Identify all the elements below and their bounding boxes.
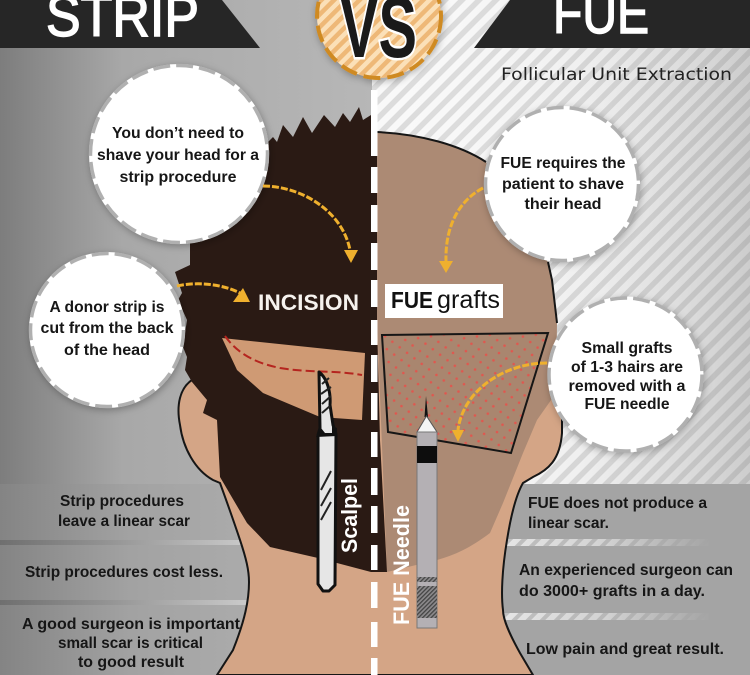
arrow: small grafts to graft area: [452, 363, 547, 442]
callout: FUE requires shaving: [484, 106, 640, 262]
callout: no shaving for strip: [89, 64, 269, 244]
text: right panel points: FUE does not produce a: [528, 495, 707, 512]
arrow: shaving callout to incision: [263, 186, 358, 263]
label: FUE grafts: [385, 284, 503, 318]
FUE graft area: [382, 333, 548, 453]
callout: FUE requires shaving: FUE requires the: [500, 155, 626, 172]
header banner: STRIP: [0, 0, 260, 49]
callout: small grafts: [548, 296, 704, 452]
callout: small grafts: of 1-3 hairs are: [571, 359, 683, 376]
incision dashed line: [225, 336, 362, 375]
icon: scalpel: [316, 372, 337, 591]
callout: donor strip: A donor strip is: [50, 299, 165, 316]
text: left panel points: to good result: [78, 654, 184, 671]
head illustration: [175, 107, 562, 675]
text: right panel points: An experienced surgeon can: [519, 562, 733, 579]
strip incision flap: [222, 338, 365, 420]
callout: donor strip: cut from the back: [40, 320, 174, 337]
callout: donor strip: of the head: [64, 342, 150, 359]
callout: small grafts: FUE needle: [584, 396, 670, 413]
arrow: donor callout to incision: [177, 284, 250, 302]
center dashed divider: [371, 90, 378, 675]
left comparison panels: [0, 484, 260, 675]
header banner: FUE: [474, 0, 750, 48]
text: right panel points: [519, 495, 733, 658]
scalp outline: [377, 132, 557, 323]
text: left panel points: A good surgeon is important: [22, 616, 240, 633]
text: right panel points: Low pain and great result.: [526, 641, 724, 658]
arrow: FUE callout to grafts: [439, 188, 483, 273]
shaved scalp right: [377, 132, 557, 572]
background: right FUE side: [372, 0, 750, 675]
callout: donor strip: [29, 252, 185, 408]
text: left panel points: Strip procedures cost less.: [25, 564, 223, 581]
text: right panel points: linear scar.: [528, 515, 609, 532]
background: left strip side: [0, 0, 372, 675]
callout: small grafts: Small grafts: [582, 340, 673, 357]
hair left: [175, 107, 387, 572]
right comparison panels: [490, 484, 750, 675]
text: left panel points: [22, 493, 240, 671]
text: left panel points: leave a linear scar: [58, 513, 190, 530]
callout: no shaving for strip: strip procedure: [120, 169, 237, 186]
text: right panel points: do 3000+ grafts in a day.: [519, 583, 705, 600]
label: Scalpel: Scalpel: [337, 478, 362, 553]
callout: FUE requires shaving: patient to shave: [502, 176, 624, 193]
label: FUE grafts: grafts: [437, 286, 500, 314]
label: FUE grafts: FUE: [391, 287, 433, 313]
subtitle: Follicular Unit Extraction: [501, 65, 732, 85]
callout: no shaving for strip: You don’t need to: [112, 125, 244, 142]
callout: no shaving for strip: shave your head for a: [97, 147, 259, 164]
label: FUE Needle: FUE Needle: [389, 505, 414, 625]
icon: FUE needle: [417, 396, 437, 628]
neck and ears skin: [178, 300, 562, 675]
text: left panel points: small scar is critical: [58, 635, 203, 652]
callout: FUE requires shaving: their head: [524, 196, 602, 213]
label: incision: INCISION: [258, 290, 359, 315]
callout: small grafts: removed with a: [568, 378, 686, 395]
text: left panel points: Strip procedures: [60, 493, 184, 510]
